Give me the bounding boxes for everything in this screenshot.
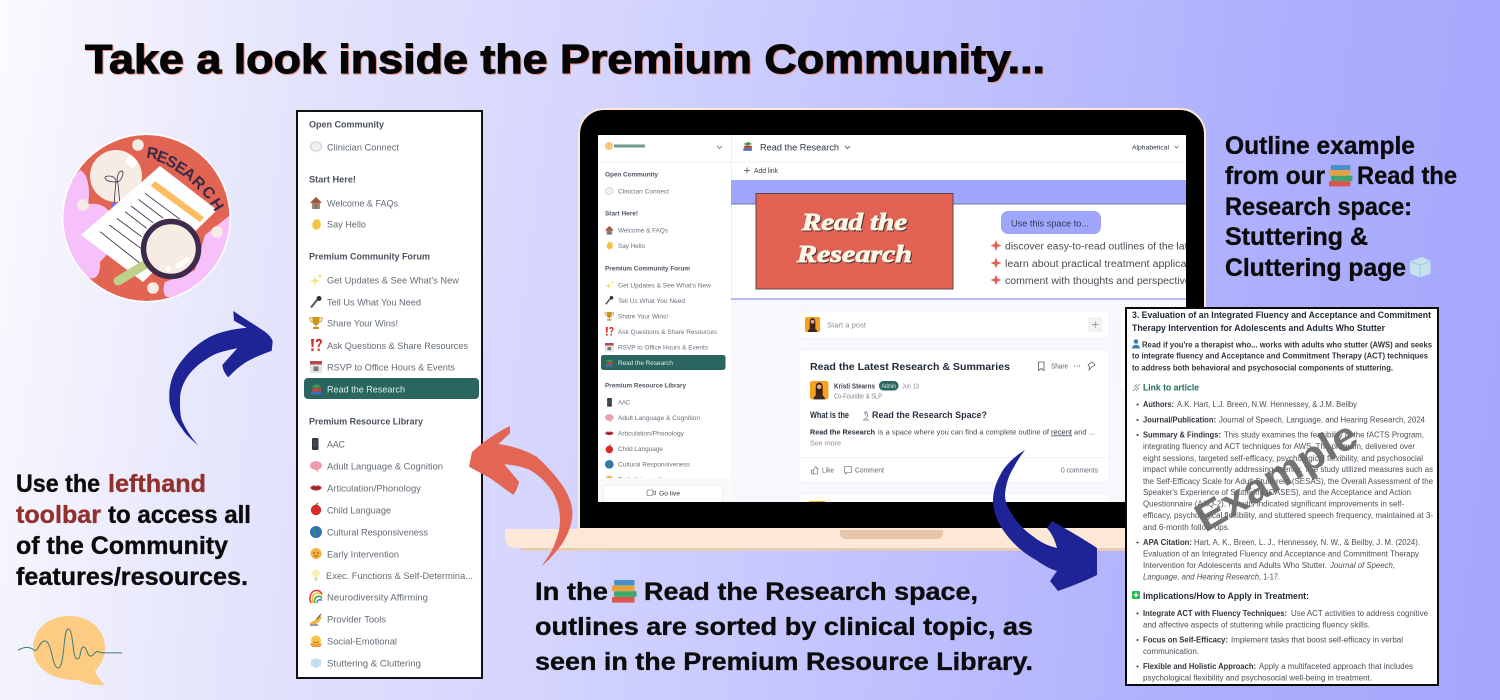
panel: enlarged community sidebar: Exec. Functions & Self-Determina... <box>326 571 473 582</box>
panel: outline example document: This study examines the feasibility of the fACTS Program, <box>1224 430 1424 440</box>
panel: outline example document: efficacy, psychological flexibility, and stuttered speech frequency, maintained at 3- <box>1143 511 1433 520</box>
panel: outline example document: Read if you're a therapist who... works with adults who stutter (AWS) and seeks <box>1142 340 1433 350</box>
red title card: Research <box>796 242 912 268</box>
panel: outline example document: communication. <box>1143 647 1199 656</box>
side card <box>1120 312 1125 390</box>
icon: books <box>612 580 637 603</box>
panel: outline example document: integrating fluency and ACT techniques for AWS. The program, delivered over <box>1143 442 1415 451</box>
panel: outline example document: impact while concurrently addressing fluency. The study utilized measures such as <box>1143 465 1433 474</box>
arrow: blue pointing to document <box>993 450 1097 591</box>
screen top bar: Read the Research <box>760 142 839 152</box>
icon: research badge: RESEARCH <box>145 145 226 214</box>
laptop base <box>505 529 1279 551</box>
panel: enlarged community sidebar <box>297 111 482 678</box>
text: lefthand toolbar caption: of the Community <box>16 532 228 560</box>
panel: enlarged community sidebar: Say Hello <box>327 220 366 230</box>
panel: outline example document: Language, and Hearing Research <box>1143 572 1260 582</box>
text: outline example caption <box>1225 132 1457 282</box>
panel: outline example document: Speaker's Experience of Stuttering (OASES), and the Acceptance and Action <box>1143 488 1411 497</box>
panel: enlarged community sidebar: Open Community <box>309 120 385 130</box>
post card: Read the Research Space? <box>872 410 987 421</box>
panel: enlarged community sidebar: Articulation/Phonology <box>327 484 421 494</box>
text: outline example caption: from our <box>1225 162 1325 190</box>
screen sidebar: Welcome & FAQs <box>618 228 669 234</box>
text: read the research caption: Read the Research space, <box>644 578 978 606</box>
text: read the research caption: seen in the Premium Resource Library. <box>535 648 1033 676</box>
screen sidebar: Articulation/Phonology <box>618 430 685 438</box>
post card: Admin <box>882 384 896 390</box>
post card: and ... <box>1074 430 1095 436</box>
start a post card <box>799 311 1109 338</box>
panel: outline example document: 3. Evaluation of an Integrated Fluency and Acceptance and Commitment <box>1132 310 1431 320</box>
panel: outline example document: Hart, A. K., Breen, L. J., Hennessey, N. W., & Beilby, J. M. (2024). <box>1194 538 1420 547</box>
post card: Kristi Stearns <box>834 384 875 390</box>
icon: person <box>1132 339 1140 348</box>
panel: outline example document: and affective aspects of stuttering while practicing fluency skills. <box>1143 620 1370 630</box>
panel: laptop screen <box>598 135 1186 502</box>
panel: outline example document: A.K. Hart, L.J. Breen, N.W. Hennessey, & J.M. Beilby <box>1177 400 1357 409</box>
icon: research badge <box>50 134 235 302</box>
panel: outline example document: Authors: <box>1143 400 1174 409</box>
screen sidebar: Clinician Connect <box>618 188 669 196</box>
screen sidebar: Go live <box>659 490 680 498</box>
screen sidebar: Open Community <box>605 172 658 178</box>
panel: outline example document: Link to article <box>1143 382 1199 392</box>
screen sidebar: Tell Us What You Need <box>618 298 685 305</box>
post card: Read the Research <box>810 430 875 436</box>
icon: speech bubble with sound wave <box>18 616 122 685</box>
laptop bezel <box>579 109 1205 529</box>
screen sidebar: Cultural Responsiveness <box>618 462 691 468</box>
screen sidebar <box>598 172 731 505</box>
screen top bar: Alphabetical <box>1132 146 1169 152</box>
icon: green plus <box>1132 591 1140 599</box>
text: read the research caption <box>535 578 1033 676</box>
arrow: red pointing to sidebar <box>469 426 572 567</box>
start a post card: Start a post <box>827 322 866 330</box>
panel: outline example document: Flexible and Holistic Approach: <box>1143 662 1256 671</box>
panel: outline example document: the Self-Efficacy Scale for Adult Stutterers (SESAS), the Overall Assessment of the <box>1143 477 1434 486</box>
text: outline example caption: Cluttering page <box>1225 254 1406 282</box>
post card: Like <box>822 468 834 474</box>
panel: outline example document: Integrate ACT with Fluency Techniques: <box>1143 609 1287 618</box>
panel: outline example document: Intervention for Adolescents and Adults Who Stutter. <box>1143 561 1327 570</box>
panel: outline example document: Evaluation of an Integrated Fluency and Acceptance and Commitment Therapy <box>1143 550 1419 558</box>
red title card <box>756 194 953 289</box>
post card: is a space where you can find a complete outline of <box>878 430 1049 436</box>
screen sidebar: AAC <box>618 400 630 406</box>
next post card <box>800 494 1108 502</box>
post card: Share <box>1051 364 1068 370</box>
icon: link <box>1133 384 1140 391</box>
bullet list: comment with thoughts and perspectives <box>1005 276 1196 287</box>
text: outline example caption: Research space: <box>1225 193 1412 221</box>
post card: Read the Latest Research & Summaries <box>810 361 1010 373</box>
panel: enlarged community sidebar: Early Intervention <box>327 550 399 560</box>
panel: outline example document: Summary & Findings: <box>1143 430 1221 440</box>
post card: 0 comments <box>1061 468 1098 474</box>
panel: enlarged community sidebar: Cultural Responsiveness <box>327 528 428 538</box>
bullet list: learn about practical treatment applications <box>1005 259 1209 270</box>
bullets <box>1136 404 1138 668</box>
text: read the research caption: outlines are sorted by clinical topic, as <box>535 613 1033 641</box>
text: outline example caption: Read the <box>1357 162 1457 190</box>
arrow: blue pointing to sidebar <box>169 311 273 446</box>
screen sidebar: Adult Language & Cognition <box>618 415 700 422</box>
screen sidebar: Read the Research <box>618 360 673 367</box>
panel: enlarged community sidebar: Child Language <box>327 506 391 516</box>
highlighted item: Read the Research: Read the Research <box>327 384 405 396</box>
highlighted item: Read the Research <box>304 378 479 399</box>
panel: enlarged community sidebar: Neurodiversity Affirming <box>327 592 428 604</box>
screen sidebar: Start Here! <box>605 210 638 218</box>
panel: outline example document: , 1-17. <box>1259 572 1280 582</box>
post card: Comment <box>855 468 884 474</box>
panel: enlarged community sidebar: Tell Us What You Need <box>327 298 421 308</box>
panel: enlarged community sidebar: Get Updates & See What's New <box>327 276 459 286</box>
use this space button: Use this space to... <box>1011 218 1089 230</box>
bullet list <box>990 240 1186 286</box>
panel: enlarged community sidebar: Premium Community Forum <box>309 252 430 262</box>
text: outline example caption: Outline example <box>1225 132 1415 160</box>
screen sidebar: Get Updates & See What's New <box>618 282 711 290</box>
panel: enlarged community sidebar: Stuttering & Cluttering <box>327 658 421 670</box>
icon: books inline <box>1329 165 1352 186</box>
panel: outline example document <box>1126 308 1438 685</box>
panel: enlarged community sidebar: Premium Resource Library <box>309 416 424 428</box>
panel: outline example document: and 6-month follow-ups. <box>1143 523 1230 532</box>
panel: outline example document: Implications/How to Apply in Treatment: <box>1143 591 1309 601</box>
use this space button <box>1001 211 1101 234</box>
panel: outline example document: APA Citation: <box>1143 538 1192 547</box>
text: outline example caption: Stuttering & <box>1225 223 1368 251</box>
post card: What is the <box>810 410 849 421</box>
panel: enlarged community sidebar: RSVP to Office Hours & Events <box>327 362 455 374</box>
panel: enlarged community sidebar: Welcome & FAQs <box>327 198 398 210</box>
panel: outline example document: to integrate fluency and Acceptance and Commitment Therapy (ACT) techniques <box>1132 352 1429 360</box>
screen top bar: Add link <box>754 168 778 175</box>
text: read the research caption: In the <box>535 578 608 606</box>
screen sidebar: Share Your Wins! <box>618 314 668 320</box>
text: lefthand toolbar caption: toolbar <box>16 501 101 529</box>
panel: outline example document: Questionnaire (AAQ-2). Results indicated significant improvements in self- <box>1143 500 1404 508</box>
panel: enlarged community sidebar: Provider Tools <box>327 614 386 626</box>
panel: enlarged community sidebar: AAC <box>327 440 345 450</box>
panel: outline example document: to address both behavioral and psychosocial components of stuttering. <box>1132 364 1393 372</box>
post card: recent <box>1051 430 1072 436</box>
panel: enlarged community sidebar: Social-Emotional <box>327 636 397 648</box>
red title card: Read the <box>801 210 907 236</box>
panel: outline example document: Journal/Publication: <box>1143 416 1216 424</box>
text: lefthand toolbar caption <box>16 470 251 591</box>
panel: enlarged community sidebar: Start Here! <box>309 174 356 186</box>
screen sidebar: RSVP to Office Hours & Events <box>618 344 709 352</box>
panel: outline example document: Therapy Intervention for Adolescents and Adults Who Stutter <box>1132 323 1385 333</box>
bullet list: discover easy-to-read outlines of the latest research <box>1005 242 1245 252</box>
panel: enlarged community sidebar: Ask Questions & Share Resources <box>327 341 468 352</box>
panel: outline example document: Journal of Speech, <box>1329 561 1395 570</box>
post card: See more <box>810 440 841 448</box>
panel: outline example document: Implement tasks that boost self-efficacy in verbal <box>1231 636 1403 644</box>
panel: enlarged community sidebar: Share Your Wins! <box>327 318 398 330</box>
panel: outline example document: Journal of Speech, Language, and Hearing Research, 2024 <box>1219 416 1426 424</box>
text: lefthand toolbar caption: Use the <box>16 470 100 498</box>
text: lefthand toolbar caption: features/resources. <box>16 563 248 591</box>
post card: Jun 13 <box>902 384 919 390</box>
post card: Co-Founder & SLP <box>834 394 882 400</box>
text: lefthand toolbar caption: to access all <box>108 501 251 529</box>
panel: outline example document: Focus on Self-Efficacy: <box>1143 636 1228 644</box>
screen top bar <box>598 135 1186 298</box>
post card <box>799 350 1109 482</box>
screen sidebar: Premium Community Forum <box>605 266 690 272</box>
panel: enlarged community sidebar: Adult Language & Cognition <box>327 462 443 472</box>
panel: outline example document: Use ACT activities to address cognitive <box>1291 609 1429 618</box>
title: Take a look inside the Premium Community... <box>85 36 1045 82</box>
screen sidebar: Early Intervention <box>618 476 669 484</box>
screen sidebar: Child Language <box>618 446 663 453</box>
screen sidebar: Ask Questions & Share Resources <box>618 329 718 336</box>
panel: outline example document: psychological flexibility and psychosocial well-being in treatment. <box>1143 674 1372 682</box>
panel: enlarged community sidebar: Clinician Connect <box>327 142 399 154</box>
panel: outline example document: Apply a multifaceted approach that includes <box>1259 662 1413 671</box>
screen banner <box>731 180 1186 502</box>
text: lefthand toolbar caption: lefthand <box>108 470 206 498</box>
watermark: Example: Example <box>1188 413 1365 541</box>
panel: outline example document: eight sessions, targeted self-efficacy, psychological flexibility, and psychosocial <box>1143 454 1423 463</box>
screen sidebar: Premium Resource Library <box>605 382 686 390</box>
screen sidebar: Say Hello <box>618 243 645 250</box>
icon: ice cube <box>1410 257 1431 278</box>
